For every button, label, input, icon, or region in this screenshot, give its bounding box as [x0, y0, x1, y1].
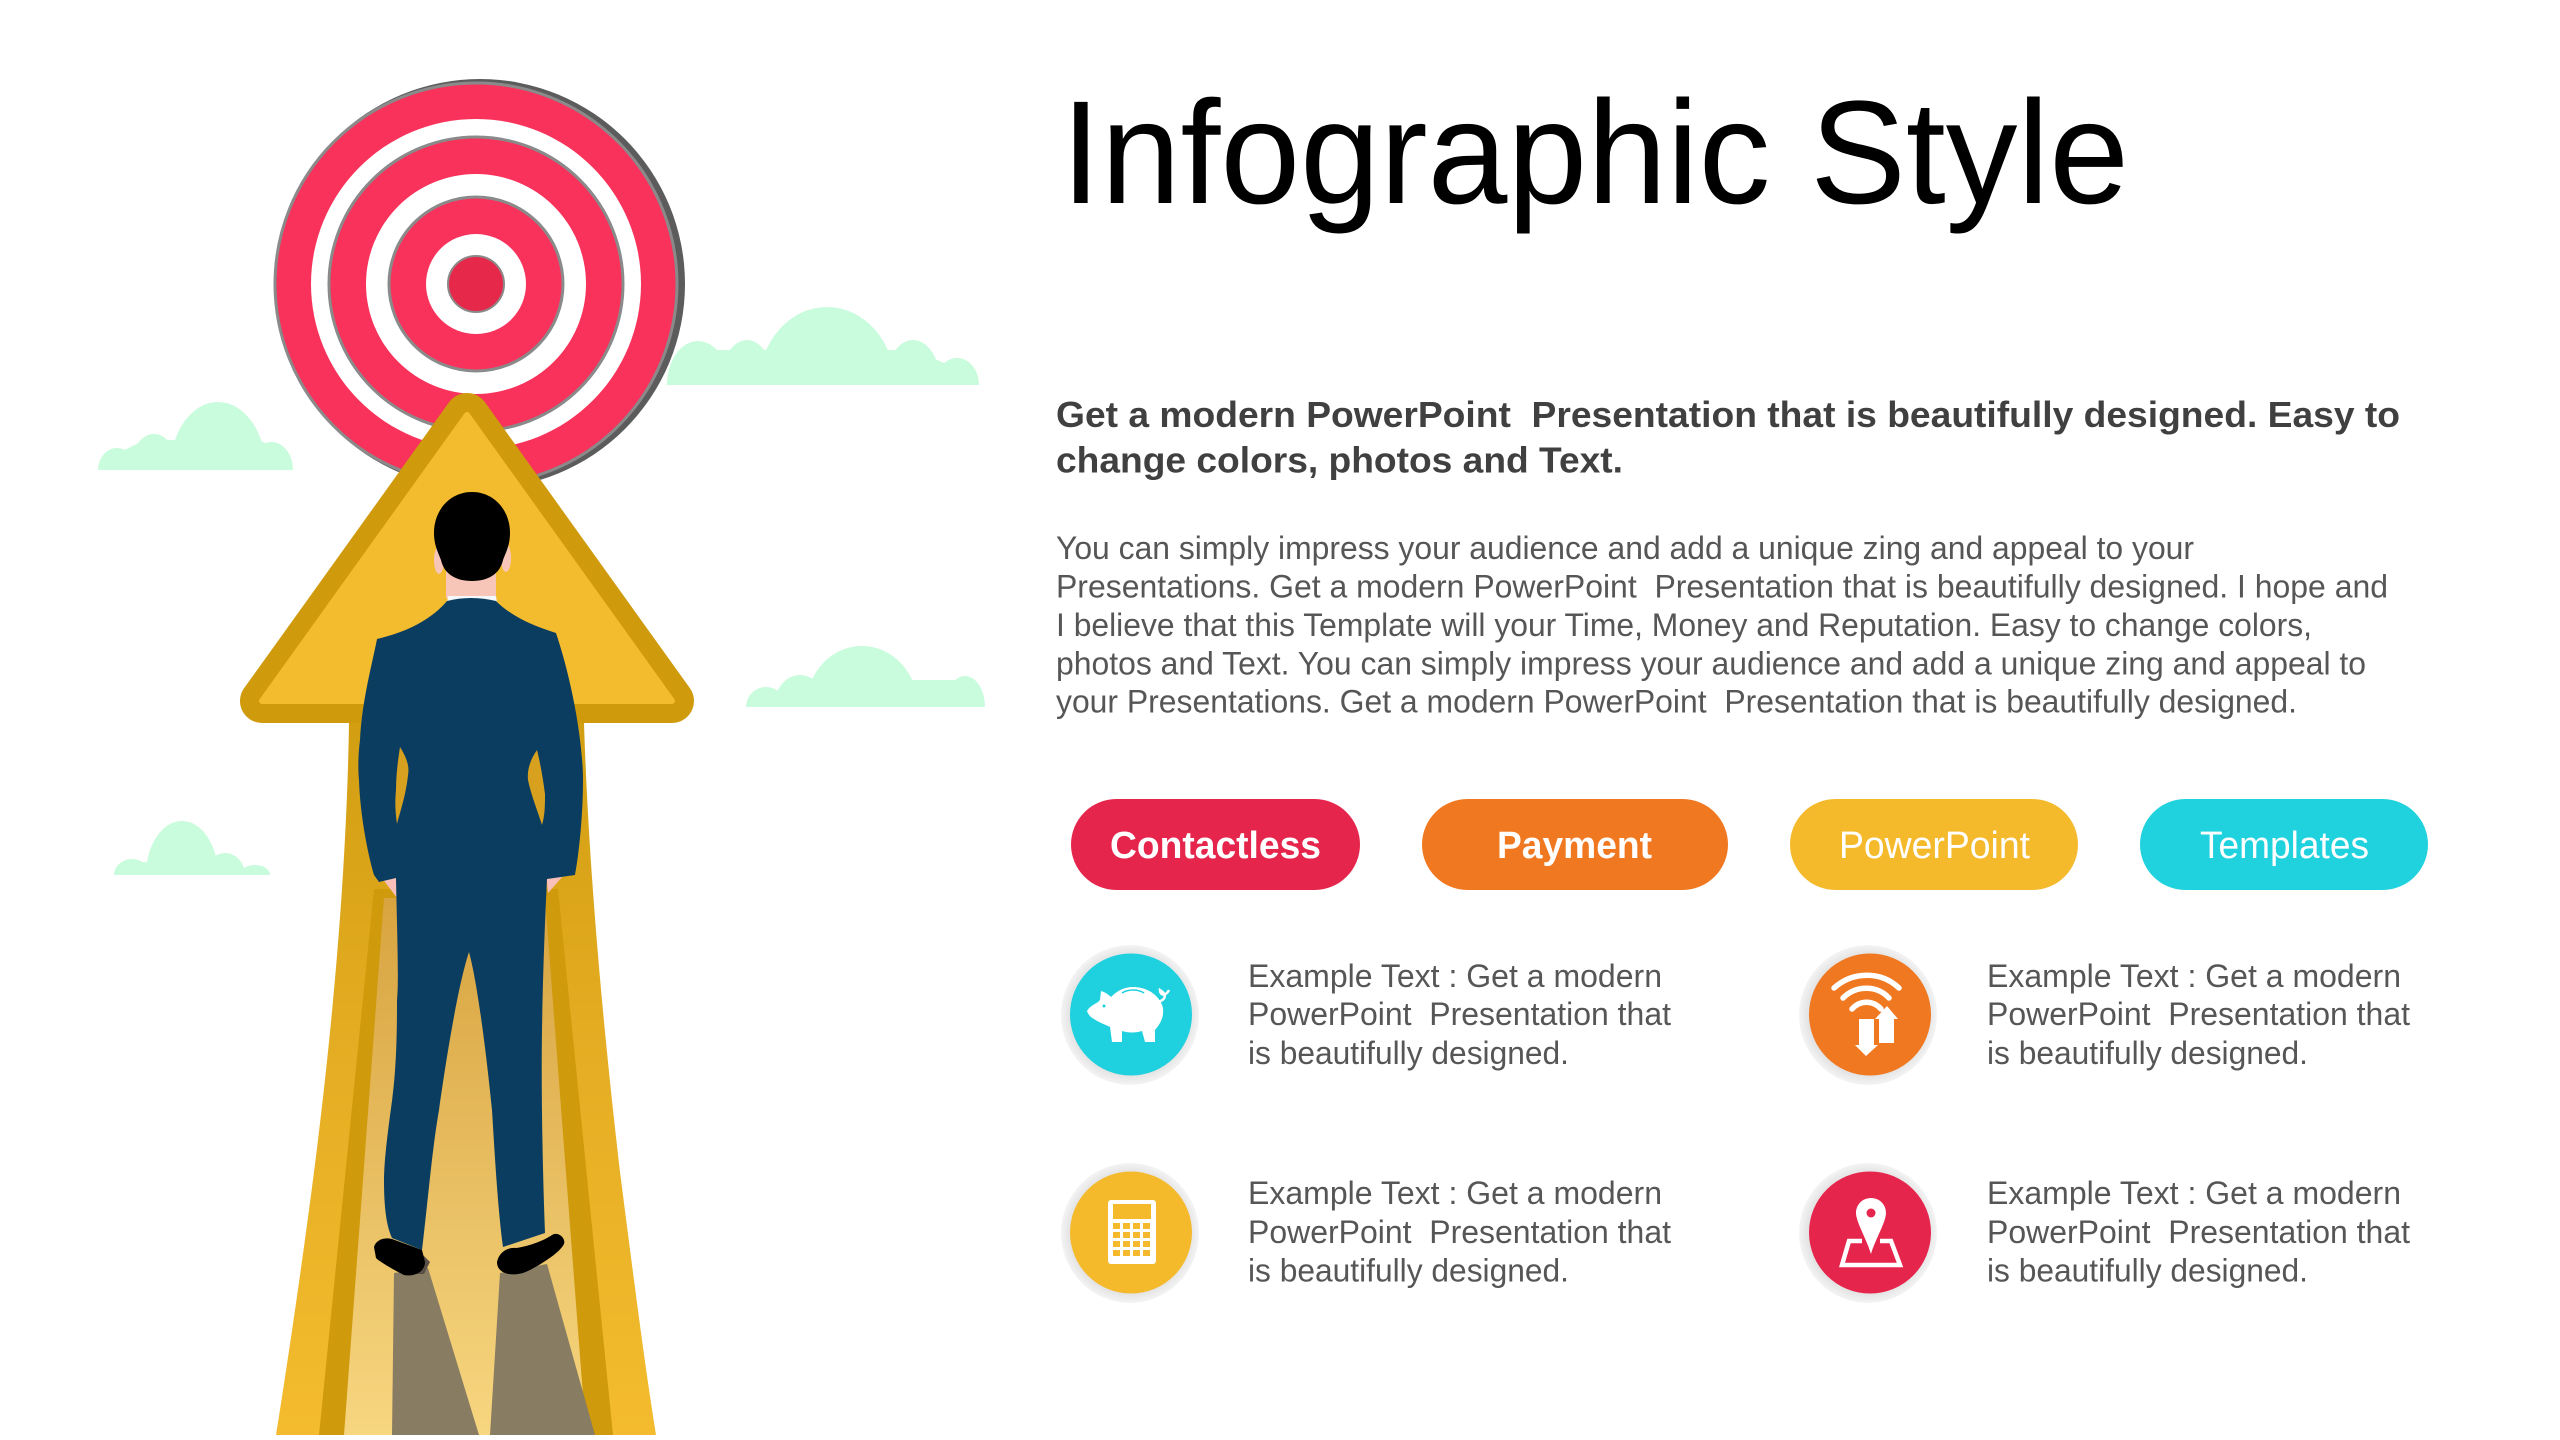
text: example bottom right: [1987, 1175, 2410, 1288]
text: example top right: is beautifully designed.: [1987, 1035, 2308, 1071]
text: example bottom right: Example Text : Get a modern: [1987, 1175, 2401, 1211]
body paragraph: your Presentations. Get a modern PowerPoint Presentation that is beautifully designed.: [1056, 684, 2297, 720]
pill: PowerPoint: PowerPoint: [1839, 825, 2030, 867]
body paragraph: photos and Text. You can simply impress your audience and add a unique zing and appeal to: [1056, 646, 2366, 682]
text: example bottom right: is beautifully designed.: [1987, 1252, 2308, 1288]
icon: map pin: [1799, 1163, 1937, 1303]
pill: Contactless: [1071, 799, 1360, 890]
body paragraph: You can simply impress your audience and add a unique zing and appeal to your: [1056, 530, 2194, 566]
text: example bottom right: PowerPoint Presentation that: [1987, 1214, 2410, 1250]
businessman: [358, 492, 583, 1275]
text: example bottom left: Example Text : Get a modern: [1248, 1175, 1662, 1211]
lead paragraph: [1056, 394, 2400, 480]
body paragraph: I believe that this Template will your Time, Money and Reputation. Easy to change colors,: [1056, 607, 2312, 643]
text: example top left: PowerPoint Presentation that: [1248, 996, 1671, 1032]
lead paragraph: Get a modern PowerPoint Presentation that is beautifully designed. Easy to: [1056, 394, 2400, 435]
text: example top right: Example Text : Get a modern: [1987, 958, 2401, 994]
text: example top right: PowerPoint Presentation that: [1987, 996, 2410, 1032]
pill: Payment: [1422, 799, 1728, 890]
cloud: lower right: [746, 646, 985, 707]
arrow and road: [262, 415, 672, 1435]
target: [275, 79, 685, 489]
lead paragraph: change colors, photos and Text.: [1056, 440, 1623, 480]
text: example bottom left: [1248, 1175, 1671, 1288]
text: example top left: is beautifully designed.: [1248, 1035, 1569, 1071]
text: example top left: Example Text : Get a modern: [1248, 958, 1662, 994]
icon: wifi with arrows: [1799, 945, 1937, 1085]
text: example bottom left: PowerPoint Presentation that: [1248, 1214, 1671, 1250]
pill: Contactless: Contactless: [1110, 825, 1321, 867]
pill: Templates: Templates: [2200, 825, 2369, 867]
cloud: upper right: [667, 307, 979, 385]
cloud: lower left: [114, 821, 270, 875]
text: example bottom left: is beautifully designed.: [1248, 1252, 1569, 1288]
icon: piggy bank: [1061, 945, 1199, 1085]
body paragraph: [1056, 530, 2388, 720]
text: example top left: [1248, 958, 1671, 1071]
icon: calculator: [1061, 1163, 1199, 1303]
title: Infographic Style: [1061, 71, 2129, 235]
text: example top right: [1987, 958, 2410, 1071]
cloud: upper left: [98, 402, 293, 470]
pill: Payment: Payment: [1497, 825, 1652, 867]
pill: PowerPoint: [1790, 799, 2078, 890]
pill: Templates: [2140, 799, 2428, 890]
body paragraph: Presentations. Get a modern PowerPoint Presentation that is beautifully designed. I hope and: [1056, 568, 2388, 604]
